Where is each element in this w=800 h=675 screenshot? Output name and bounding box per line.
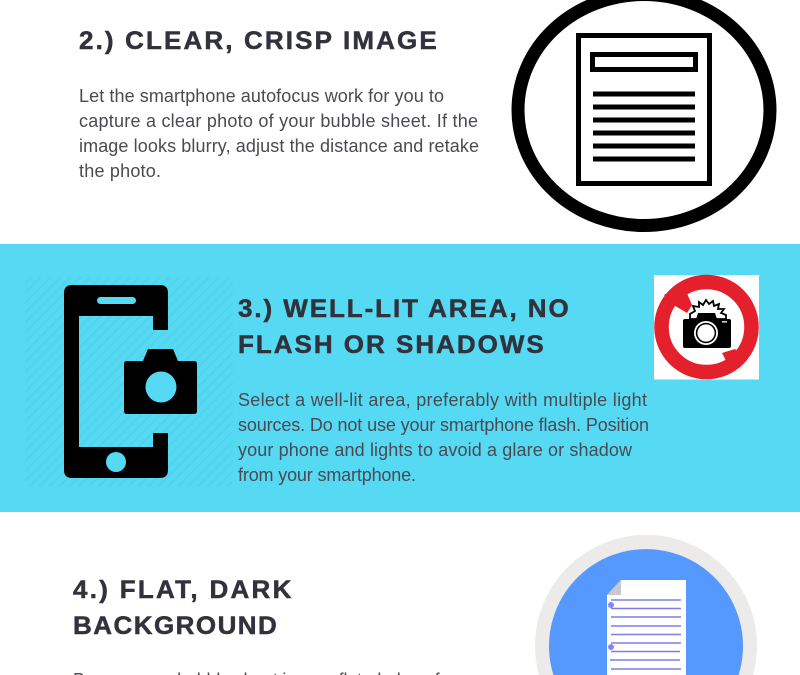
text block: section 3 body: your phone and lights to avoid a glare or shadow bbox=[238, 440, 633, 460]
text block: section 3 body bbox=[238, 390, 649, 485]
text block: section 2 body: Let the smartphone autofocus work for you to bbox=[79, 86, 444, 106]
text block: section 2 body bbox=[79, 86, 479, 181]
heading: section 4: BACKGROUND bbox=[73, 612, 277, 640]
text block: section 3 body: from your smartphone. bbox=[238, 465, 416, 485]
panel: section 3 well-lit area bbox=[0, 244, 800, 512]
icon: document in black circle bbox=[518, 0, 770, 226]
panel: section 4 flat dark background bbox=[0, 512, 800, 675]
icon: no flash sign bbox=[654, 275, 759, 380]
text block: section 2 body: image looks blurry, adjust the distance and retake bbox=[79, 136, 479, 156]
text block: section 2 body: capture a clear photo of your bubble sheet. If the bbox=[79, 111, 478, 131]
icon: smartphone with camera bbox=[64, 285, 197, 478]
heading: section 2: 2.) CLEAR, CRISP IMAGE bbox=[79, 27, 437, 55]
heading: section 3: 3.) WELL-LIT AREA, NO bbox=[238, 295, 569, 323]
panel: section 2 clear crisp image bbox=[0, 0, 800, 244]
text block: section 3 body: sources. Do not use your smartphone flash. Position bbox=[238, 415, 649, 435]
icon: paper on blue circle bbox=[535, 535, 757, 675]
heading: section 3 bbox=[238, 295, 569, 359]
heading: section 3: FLASH OR SHADOWS bbox=[238, 331, 544, 359]
text block: section 2 body: the photo. bbox=[79, 161, 161, 181]
striped backdrop behind phone icon bbox=[25, 277, 233, 487]
heading: section 4: 4.) FLAT, DARK bbox=[73, 576, 292, 604]
heading: section 4 bbox=[73, 576, 292, 640]
text block: section 3 body: Select a well-lit area, preferably with multiple light bbox=[238, 390, 647, 410]
